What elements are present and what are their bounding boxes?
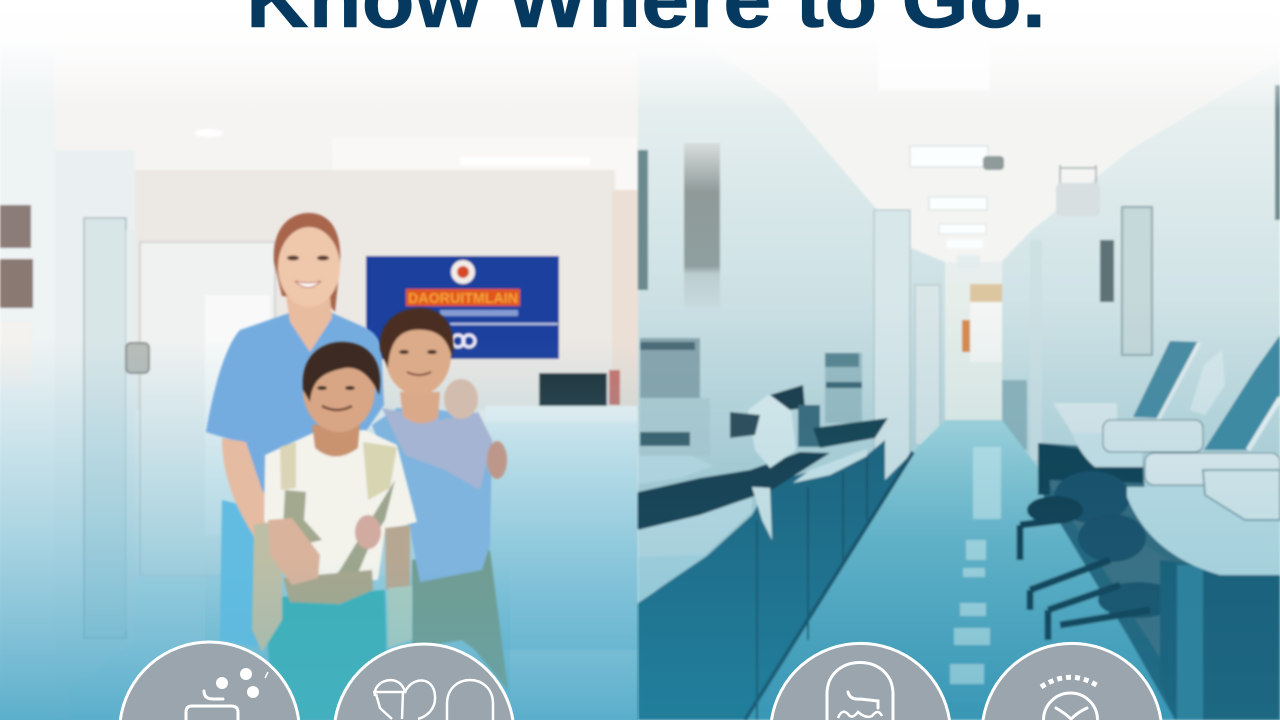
younger boy	[252, 342, 417, 720]
older boy	[372, 308, 508, 690]
people lower teal tint	[205, 560, 510, 720]
corridor walls and ceiling	[638, 0, 1280, 720]
icon badge: bubbling pot	[120, 642, 299, 720]
reception desk	[485, 370, 638, 650]
photo panel: hospital corridor	[638, 0, 1280, 720]
floor	[70, 576, 640, 720]
nurse	[206, 213, 384, 647]
wall plaques	[0, 205, 33, 387]
wall screen with hospital logo: DAORUITMLAIN	[408, 290, 518, 307]
right photo teal wash	[638, 300, 1280, 720]
right workstations and chairs	[1020, 335, 1280, 720]
top white fade behind title	[0, 0, 1280, 110]
corridor floor	[745, 420, 1200, 720]
icon badge: face with arc of dots	[983, 643, 1161, 720]
icon badge: head profiles	[335, 644, 513, 720]
left counter cabinets	[638, 338, 913, 720]
reception room walls and ceiling	[0, 0, 640, 720]
wall screen with hospital logo	[366, 256, 559, 359]
door handle	[126, 343, 149, 373]
ceiling lights	[878, 44, 1100, 269]
left photo teal wash	[0, 340, 638, 720]
photo panel: reception with nurse and two children	[0, 0, 640, 720]
icon badge: face with irritated skin	[772, 643, 950, 720]
wall details	[638, 85, 1280, 490]
